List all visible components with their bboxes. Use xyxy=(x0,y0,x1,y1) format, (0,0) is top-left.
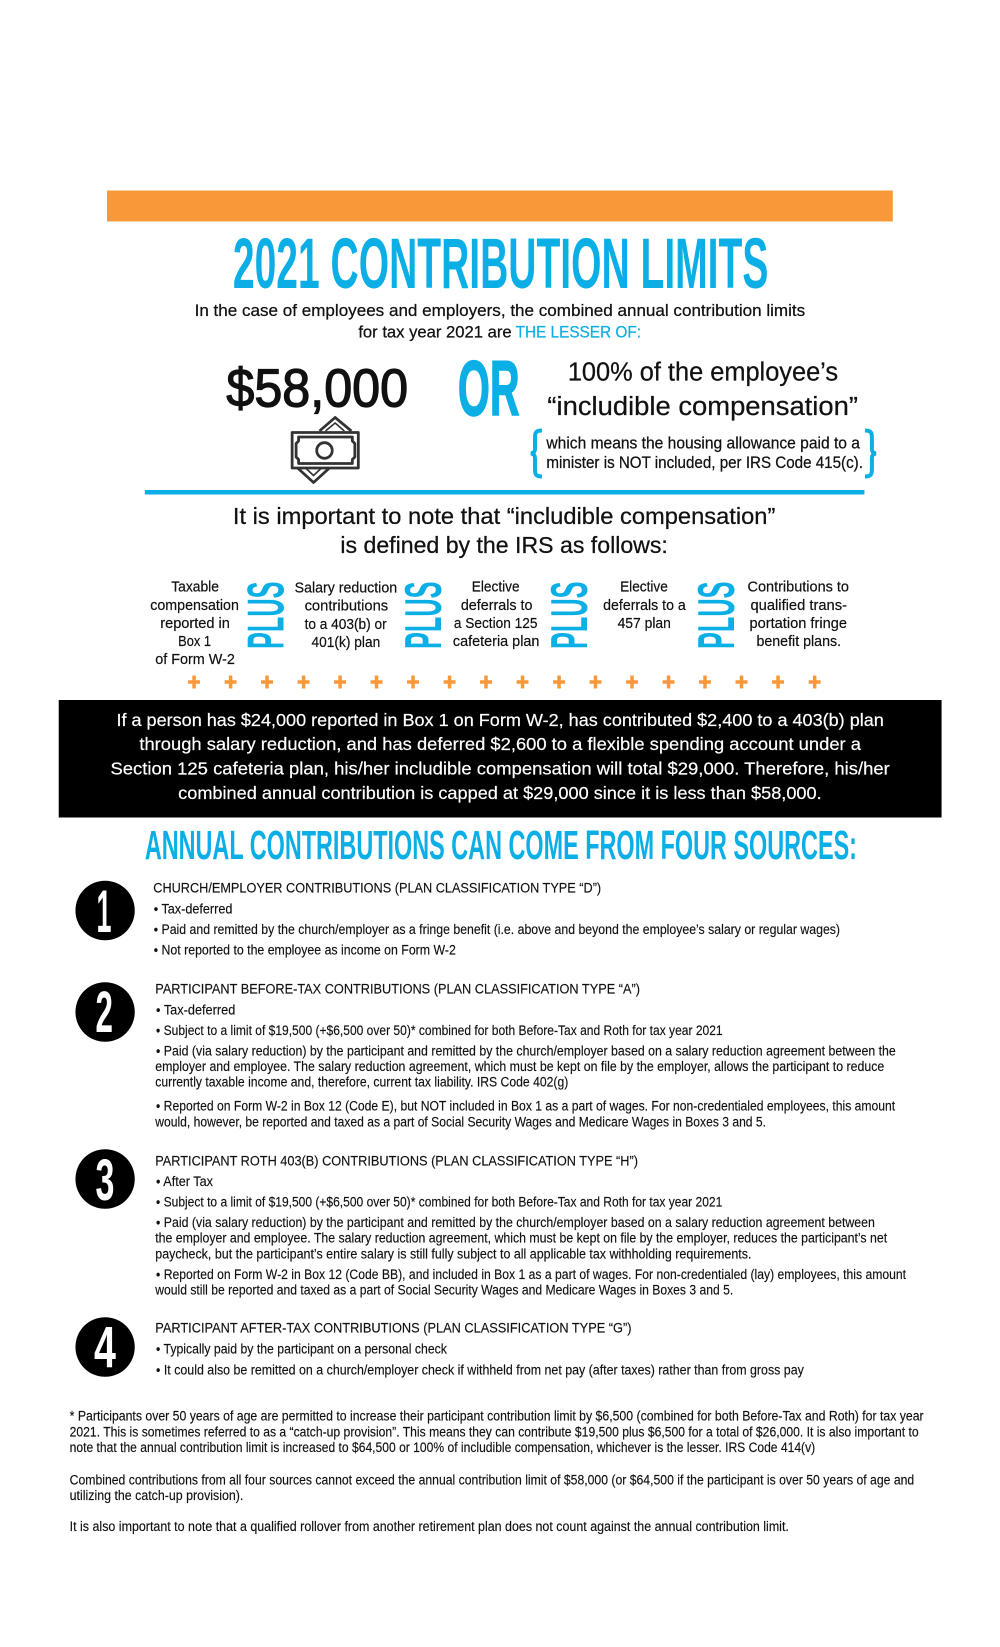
orange header bar xyxy=(107,190,893,222)
item: transportation fringe xyxy=(747,579,849,650)
source 4: after-tax contributions: PARTICIPANT AFTER-TAX CONTRIBUTIONS (PLAN CLASSIFICATION TYPE “G”) xyxy=(155,1320,632,1336)
black example panel: combined annual contribution is capped at $29,000 since it is less than $58,000. xyxy=(178,783,822,803)
source 2: before-tax contributions: currently taxable income and, therefore, current tax liability. IRS Code 402(g) xyxy=(155,1074,568,1090)
item: 457 plan: 457 plan xyxy=(618,615,671,632)
badge 2: 2 xyxy=(96,981,113,1045)
item: 457 plan: Elective xyxy=(620,579,668,596)
source 3: Roth 403(b) contributions: • Paid (via salary reduction) by the participant and remitted by the church/employer based on a salary reduction agreement between xyxy=(156,1214,875,1230)
item: transportation fringe: qualified trans- xyxy=(750,597,847,614)
item: salary reduction: contributions xyxy=(305,598,388,615)
source 2: before-tax contributions: • Paid (via salary reduction) by the participant and remitted by the church/employer based on a salary reduction agreement between the xyxy=(156,1042,896,1058)
item: taxable compensation: reported in xyxy=(160,615,230,632)
black example panel xyxy=(59,700,942,818)
blue divider xyxy=(145,490,864,494)
OR: OR xyxy=(458,346,520,432)
row of orange plus signs xyxy=(188,676,821,688)
source 2: before-tax contributions: • Tax-deferred xyxy=(156,1001,235,1017)
icon: money xyxy=(292,418,358,482)
item: section 125 deferrals xyxy=(453,579,539,650)
source 1: church/employer contributions: • Not reported to the employee as income on Form W-2 xyxy=(154,941,456,957)
badge 1: 1 xyxy=(97,878,111,945)
brace note: housing allowance: minister is NOT included, per IRS Code 415(c). xyxy=(546,454,863,472)
source 4: after-tax contributions xyxy=(155,1320,804,1377)
source 3: Roth 403(b) contributions: • Reported on Form W-2 in Box 12 (Code BB), and included in Box 1 as a part of wages. For non-credentialed (lay) employees, this amount xyxy=(156,1266,906,1282)
includible compensation statement: 100% of the employee’s xyxy=(568,358,838,387)
source 3: Roth 403(b) contributions: • After Tax xyxy=(156,1173,213,1189)
includible compensation statement xyxy=(547,358,858,421)
source 2: before-tax contributions xyxy=(154,981,896,1129)
item: transportation fringe: portation fringe xyxy=(749,615,847,632)
item: salary reduction: Salary reduction xyxy=(295,580,397,597)
source 2: before-tax contributions: would, however, be reported and taxed as a part of Social Security Wages and Medicare Wages in Boxes 3 and 5. xyxy=(154,1113,766,1129)
badge 4 xyxy=(75,1316,135,1380)
source 1: church/employer contributions: CHURCH/EMPLOYER CONTRIBUTIONS (PLAN CLASSIFICATION TYPE “D”) xyxy=(153,880,601,896)
source 2: before-tax contributions: • Subject to a limit of $19,500 (+$6,500 over 50)* combined for both Before-Tax and Roth for tax year 2021 xyxy=(156,1022,723,1038)
footnote: combined contributions: utilizing the catch-up provision). xyxy=(70,1487,243,1503)
item: section 125 deferrals: cafeteria plan xyxy=(453,633,539,650)
source 3: Roth 403(b) contributions xyxy=(154,1152,906,1298)
badge 3: 3 xyxy=(96,1149,114,1213)
source 1: church/employer contributions xyxy=(153,880,840,957)
footnote: rollover: It is also important to note that a qualified rollover from another retirement plan does not count against the annual contribution limit. xyxy=(70,1518,789,1534)
item: taxable compensation: compensation xyxy=(150,597,239,614)
source 3: Roth 403(b) contributions: PARTICIPANT ROTH 403(B) CONTRIBUTIONS (PLAN CLASSIFICATION TYPE “H”) xyxy=(155,1152,638,1168)
source 3: Roth 403(b) contributions: paycheck, but the participant’s entire salary is still fully subject to all applicable tax withholding requirements. xyxy=(155,1246,751,1262)
item: salary reduction: to a 403(b) or xyxy=(305,616,387,633)
item: salary reduction: 401(k) plan xyxy=(312,634,380,651)
intro text: for tax year 2021 are xyxy=(358,322,512,342)
intro text: In the case of employees and employers, the combined annual contribution limits xyxy=(195,301,805,320)
item: 457 plan: deferrals to a xyxy=(603,597,686,614)
source 3: Roth 403(b) contributions: • Subject to a limit of $19,500 (+$6,500 over 50)* combined for both Before-Tax and Roth for tax year 2021 xyxy=(156,1193,723,1209)
infographic page: PLUS xyxy=(237,582,295,649)
infographic page: PLUS xyxy=(687,582,745,649)
item: taxable compensation: of Form W-2 xyxy=(155,651,235,668)
badge 4: 4 xyxy=(94,1316,116,1380)
source 2: before-tax contributions: PARTICIPANT BEFORE-TAX CONTRIBUTIONS (PLAN CLASSIFICATION TYPE “A”) xyxy=(155,981,640,997)
intro text: THE LESSER OF: xyxy=(516,322,641,342)
badge 2 xyxy=(75,981,135,1045)
definition heading: is defined by the IRS as follows: xyxy=(340,532,668,558)
item: section 125 deferrals: deferrals to xyxy=(461,597,532,614)
source 3: Roth 403(b) contributions: the employer and employee. The salary reduction agreement, which must be kept on file by the employer, reduces the participant’s net xyxy=(155,1230,887,1246)
item: section 125 deferrals: a Section 125 xyxy=(454,615,537,632)
source 3: Roth 403(b) contributions: would still be reported and taxed as a part of Social Security Wages and Medicare Wages in Boxes 3 and 5. xyxy=(154,1282,733,1298)
badge 1 xyxy=(75,878,135,945)
black example panel: through salary reduction, and has deferred $2,600 to a flexible spending account under a xyxy=(139,734,861,754)
item: transportation fringe: benefit plans. xyxy=(756,633,841,650)
item: taxable compensation xyxy=(150,579,239,668)
footnote: combined contributions xyxy=(70,1471,914,1503)
black example panel: If a person has $24,000 reported in Box 1 on Form W-2, has contributed $2,400 to a 403(b) plan xyxy=(116,710,884,730)
source 1: church/employer contributions: • Tax-deferred xyxy=(154,900,232,916)
source 4: after-tax contributions: • Typically paid by the participant on a personal check xyxy=(156,1341,447,1357)
item: taxable compensation: Taxable xyxy=(171,579,219,596)
item: taxable compensation: Box 1 xyxy=(178,633,211,650)
definition heading: It is important to note that “includible compensation” xyxy=(233,503,775,529)
item: transportation fringe: Contributions to xyxy=(747,579,849,596)
item: section 125 deferrals: Elective xyxy=(472,579,520,596)
intro text xyxy=(195,301,805,342)
footnote: catch-up provision: note that the annual contribution limit is increased to $64,500 or 100% of includible compensation, whichever is the lesser. IRS Code 414(v) xyxy=(70,1439,815,1455)
item: 457 plan xyxy=(603,579,686,632)
source 2: before-tax contributions: employer and employee. The salary reduction agreement, which must be kept on file by the employer, allows the participant to reduce xyxy=(155,1058,884,1074)
includible compensation statement: “includible compensation” xyxy=(547,393,858,421)
source 2: before-tax contributions: • Reported on Form W-2 in Box 12 (Code E), but NOT included in Box 1 as a part of wages. For non-credentialed employees, this amount xyxy=(156,1098,895,1114)
black example panel: Section 125 cafeteria plan, his/her includible compensation will total $29,000. Therefore, his/her xyxy=(110,759,890,779)
definition heading xyxy=(233,503,775,558)
infographic page: PLUS xyxy=(540,582,598,649)
footnote: catch-up provision xyxy=(70,1408,924,1455)
source 4: after-tax contributions: • It could also be remitted on a church/employer check if withheld from net pay (after taxes) rather than from gross pay xyxy=(156,1361,804,1377)
amount: $58,000: $58,000 xyxy=(226,358,408,419)
infographic page: PLUS xyxy=(394,582,452,649)
item: salary reduction xyxy=(295,580,397,651)
brace note: housing allowance xyxy=(531,430,876,476)
source 1: church/employer contributions: • Paid and remitted by the church/employer as a fringe benefit (i.e. above and beyond the employee’s salary or regular wages) xyxy=(154,921,840,937)
badge 3 xyxy=(75,1149,135,1213)
brace note: housing allowance: which means the housing allowance paid to a xyxy=(545,434,861,452)
